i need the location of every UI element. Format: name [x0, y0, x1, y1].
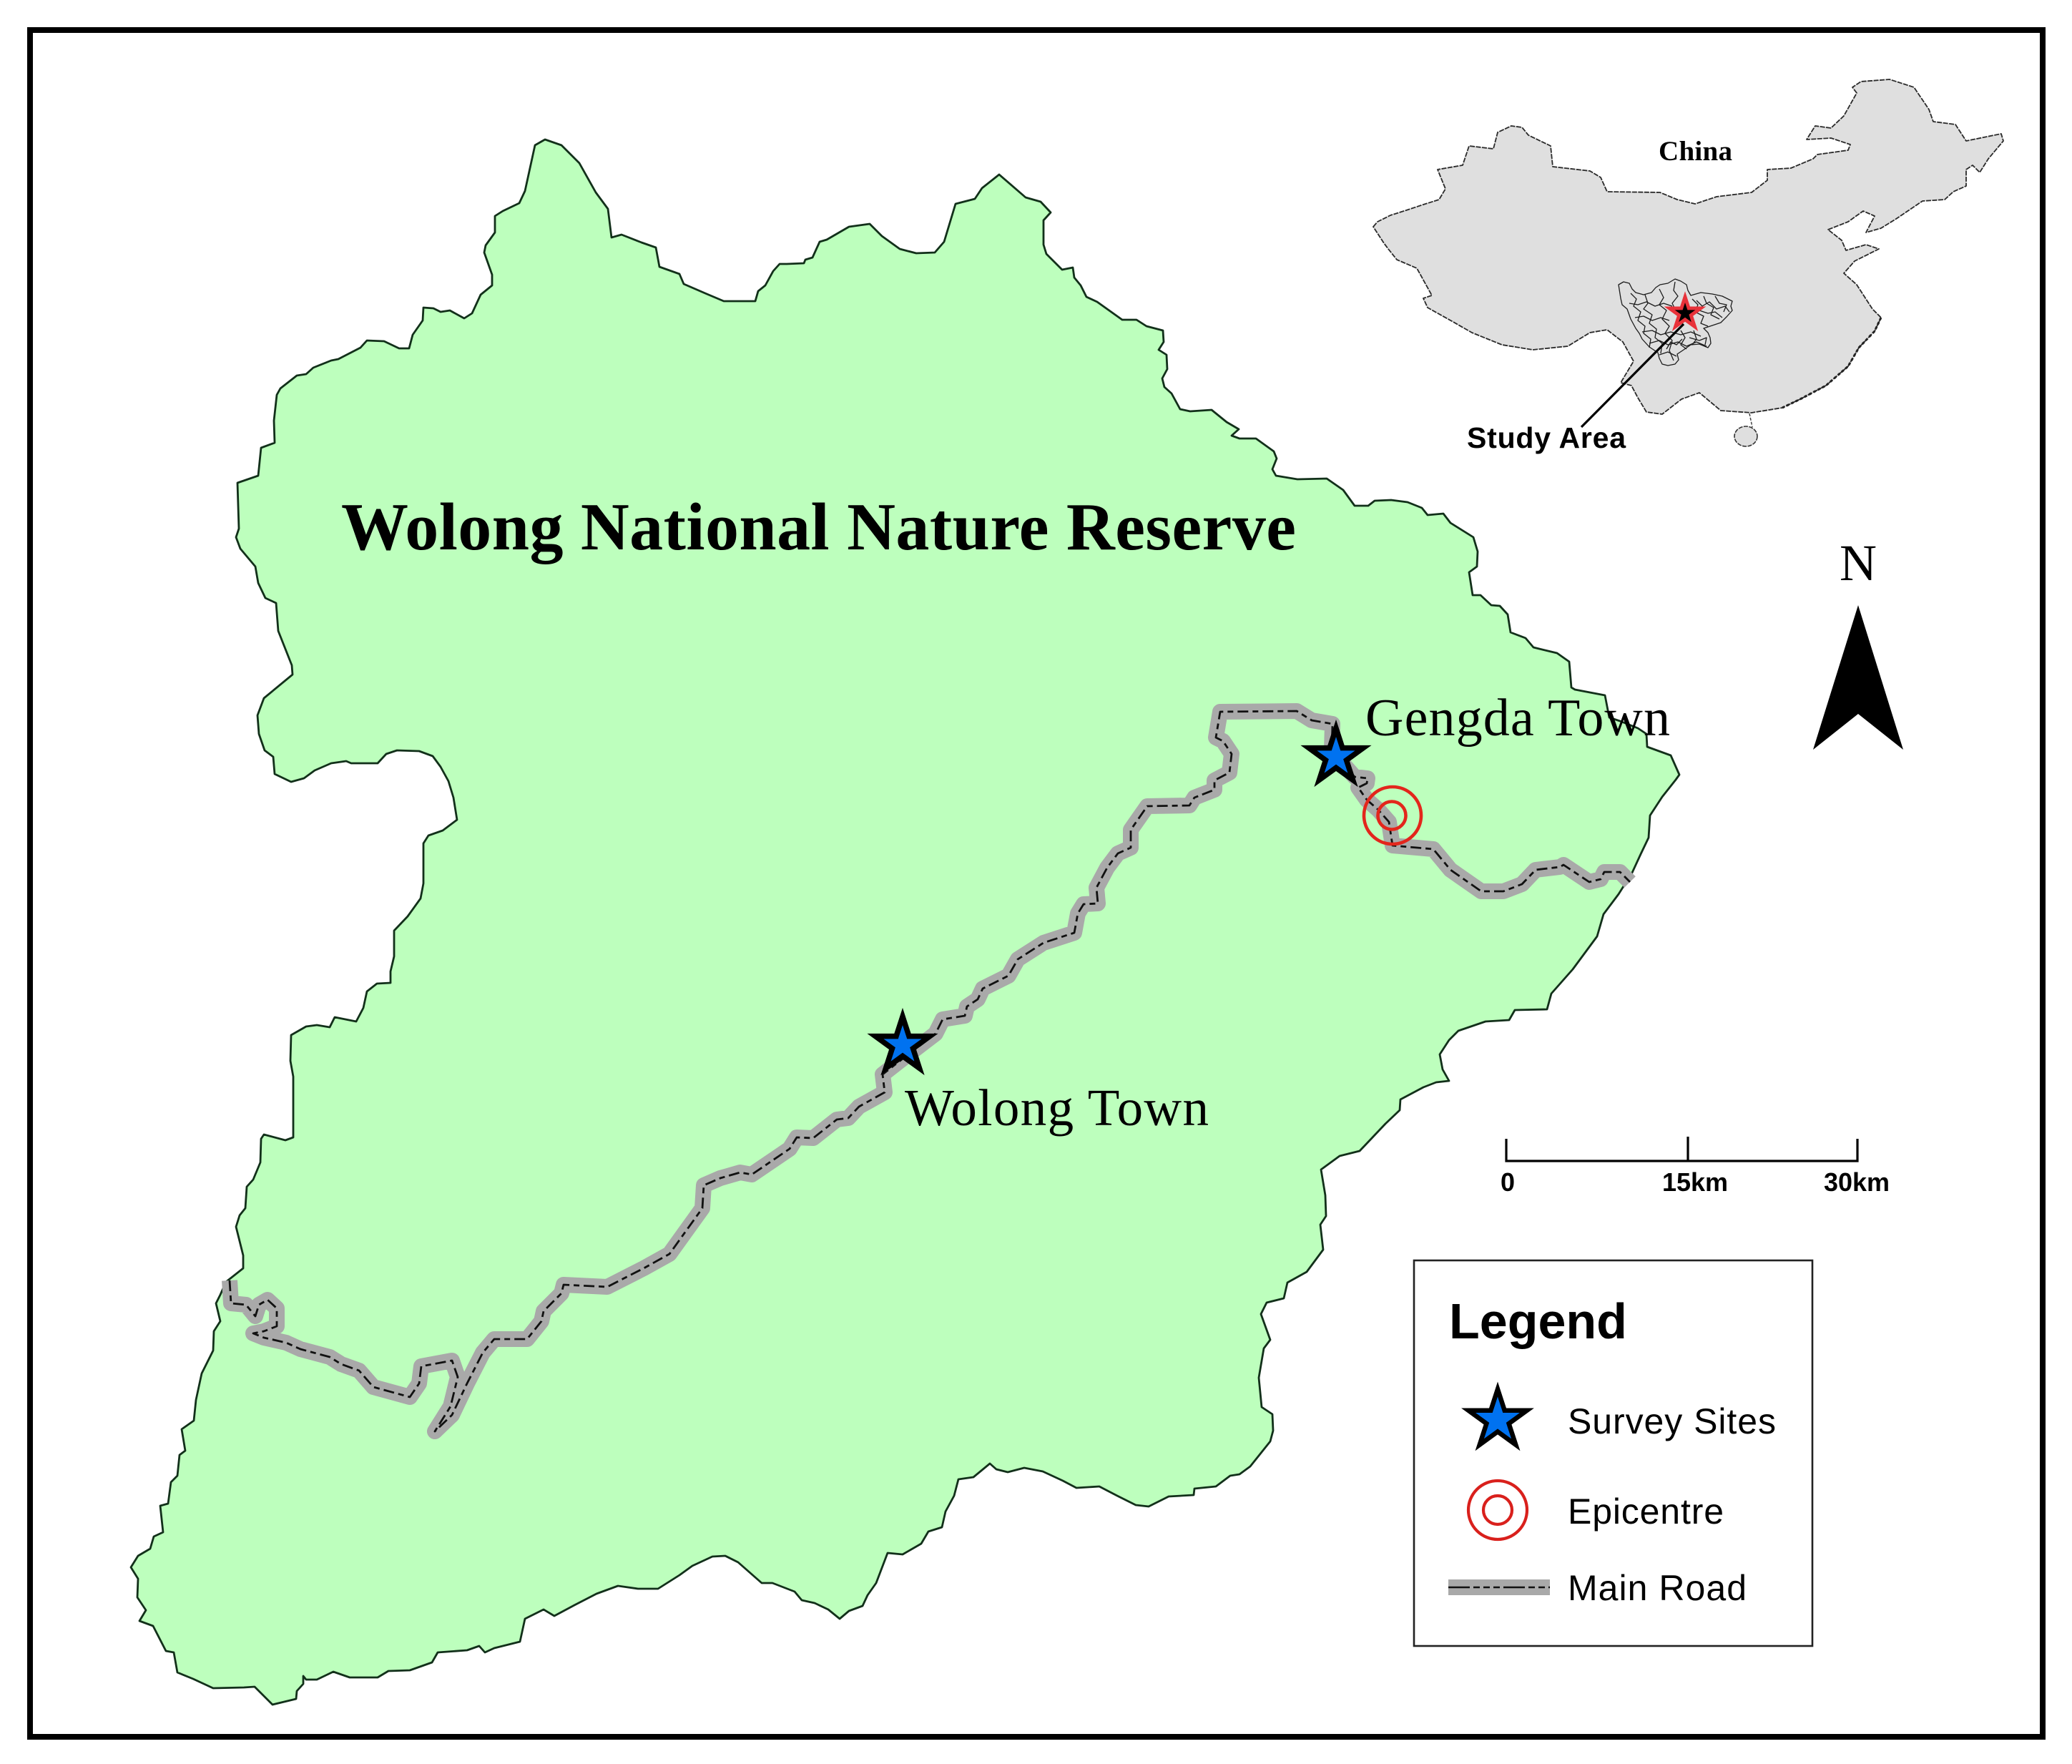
legend label: epicentre: Epicentre — [1568, 1491, 1724, 1532]
legend box — [1414, 1260, 1812, 1646]
legend label: survey sites: Survey Sites — [1568, 1401, 1776, 1441]
China outline — [1373, 79, 2003, 414]
reserve boundary polygon — [131, 139, 1679, 1705]
study area leader line — [1581, 324, 1684, 427]
label: China: China — [1659, 136, 1732, 167]
main map: Wolong reserve — [131, 139, 1679, 1705]
Hainan island — [1734, 413, 1757, 446]
epicentre marker — [1364, 787, 1421, 844]
southeast coastline speckle — [1782, 318, 1881, 408]
scale labels — [1501, 1167, 1890, 1197]
label: Gengda Town: Gengda Town — [1365, 689, 1670, 748]
survey site star: Wolong — [875, 1016, 930, 1068]
legend title: Legend — [1449, 1293, 1627, 1349]
epicentre star on inset — [1667, 295, 1703, 328]
legend — [1414, 1260, 1812, 1646]
scale bar — [1501, 1137, 1890, 1197]
legend icon: main road — [1448, 1579, 1550, 1595]
scale labels: 0 — [1501, 1167, 1515, 1197]
letter N: N — [1840, 534, 1877, 592]
north arrow — [1813, 534, 1903, 750]
Sichuan counties — [1619, 279, 1732, 366]
scale line — [1506, 1139, 1857, 1161]
scale tick — [1686, 1137, 1689, 1161]
inset map: China — [1373, 79, 2003, 454]
label: Wolong Town: Wolong Town — [905, 1079, 1209, 1137]
label: Study Area: Study Area — [1467, 421, 1626, 454]
arrow shape — [1813, 605, 1903, 750]
scale labels: 30km — [1824, 1167, 1890, 1197]
survey site star: Gengda — [1309, 728, 1363, 780]
legend label: main road: Main Road — [1568, 1568, 1747, 1608]
legend icon: epicentre — [1468, 1481, 1527, 1539]
title: Wolong National Nature Reserve — [341, 490, 1296, 564]
main road — [230, 711, 1630, 1431]
legend icon: survey site star — [1468, 1389, 1527, 1445]
scale labels: 15km — [1662, 1167, 1728, 1197]
